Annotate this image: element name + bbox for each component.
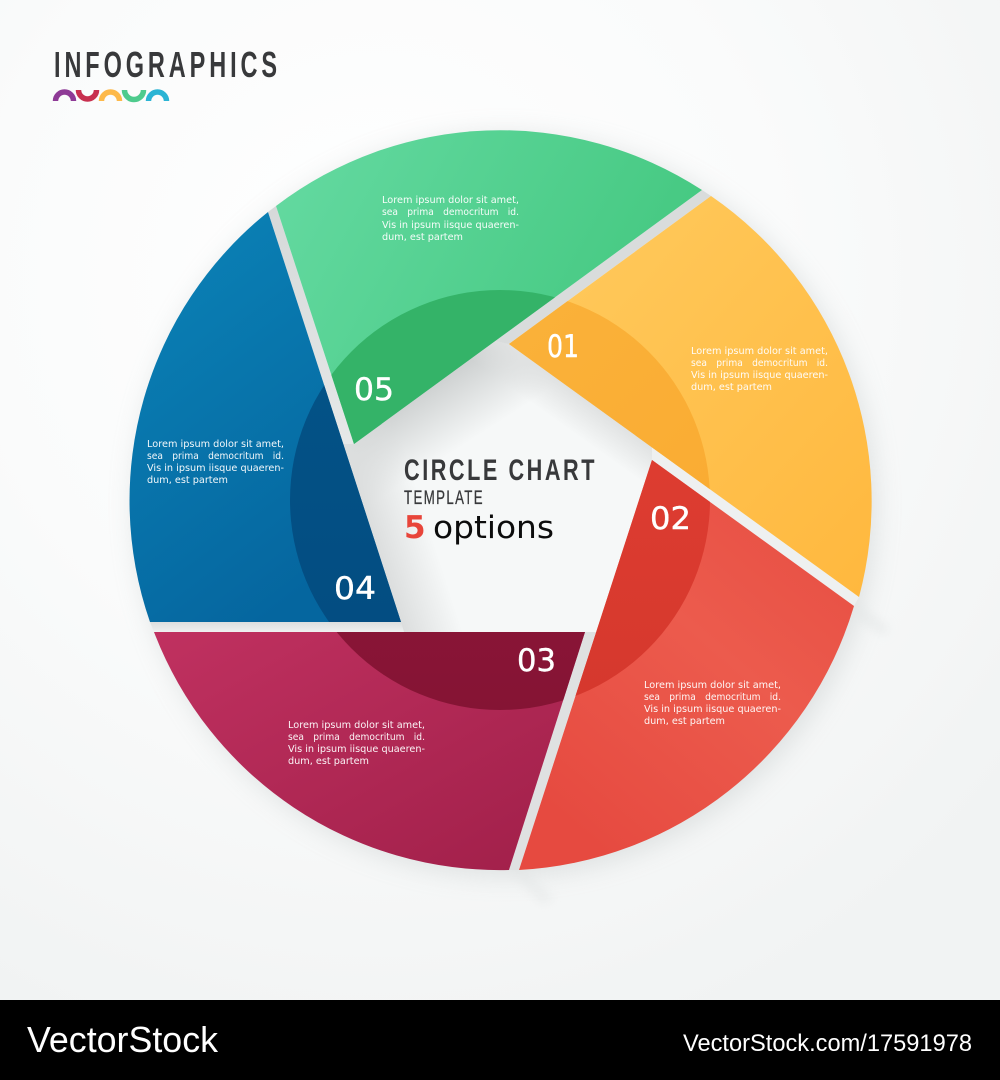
text block 02: Lorem ipsum dolor sit amet, [644, 680, 781, 691]
number 02: 02 [650, 501, 691, 537]
logo arcs [56, 90, 166, 101]
footer brand: VectorStock [27, 1019, 219, 1060]
text block 01: sea prima democritum id. [691, 358, 828, 369]
text block 04: Lorem ipsum dolor sit amet, [147, 439, 284, 450]
text block 05: dum, est partem [382, 232, 463, 243]
text block 04: Vis in ipsum iisque quaeren- [147, 463, 284, 474]
circle chart title: CIRCLE CHART [404, 454, 597, 487]
text block 03: Vis in ipsum iisque quaeren- [288, 744, 425, 755]
main title: INFOGRAPHICS [54, 44, 281, 85]
text block 02: sea prima democritum id. [644, 692, 781, 703]
text block 05: Lorem ipsum dolor sit amet, [382, 195, 519, 206]
text block 01: Vis in ipsum iisque quaeren- [691, 370, 828, 381]
segment 03: crimson [154, 632, 585, 870]
centre disc and gaps [131, 131, 869, 870]
text block 01: dum, est partem [691, 382, 772, 393]
number 05: 05 [354, 372, 394, 408]
text block 05: Vis in ipsum iisque quaeren- [382, 220, 519, 231]
text block 03: sea prima democritum id. [288, 732, 425, 743]
text block 05: sea prima democritum id. [382, 207, 519, 218]
5 options: 5 [404, 510, 426, 546]
centre heading [404, 454, 597, 546]
text block 02: Vis in ipsum iisque quaeren- [644, 704, 781, 715]
text block 01: Lorem ipsum dolor sit amet, [691, 346, 828, 357]
chart outer shadow [134, 134, 890, 904]
number 03: 03 [517, 643, 556, 679]
text block 02: dum, est partem [644, 716, 725, 727]
number 04: 04 [334, 571, 376, 607]
text block 03: dum, est partem [288, 756, 369, 767]
segment 05: green [276, 130, 702, 444]
footer bar [0, 1000, 1000, 1080]
5 options: options [433, 510, 554, 546]
footer url: VectorStock.com/17591978 [683, 1030, 972, 1057]
segment 01: yellow [509, 196, 872, 597]
text block 04: sea prima democritum id. [147, 451, 284, 462]
segment 04: blue [130, 212, 401, 622]
number 01: 01 [547, 329, 579, 365]
text block 03: Lorem ipsum dolor sit amet, [288, 720, 425, 731]
text block 04: dum, est partem [147, 475, 228, 486]
segment 02: red [519, 460, 854, 870]
centre shades [343, 341, 652, 632]
template subtitle: TEMPLATE [404, 488, 484, 509]
